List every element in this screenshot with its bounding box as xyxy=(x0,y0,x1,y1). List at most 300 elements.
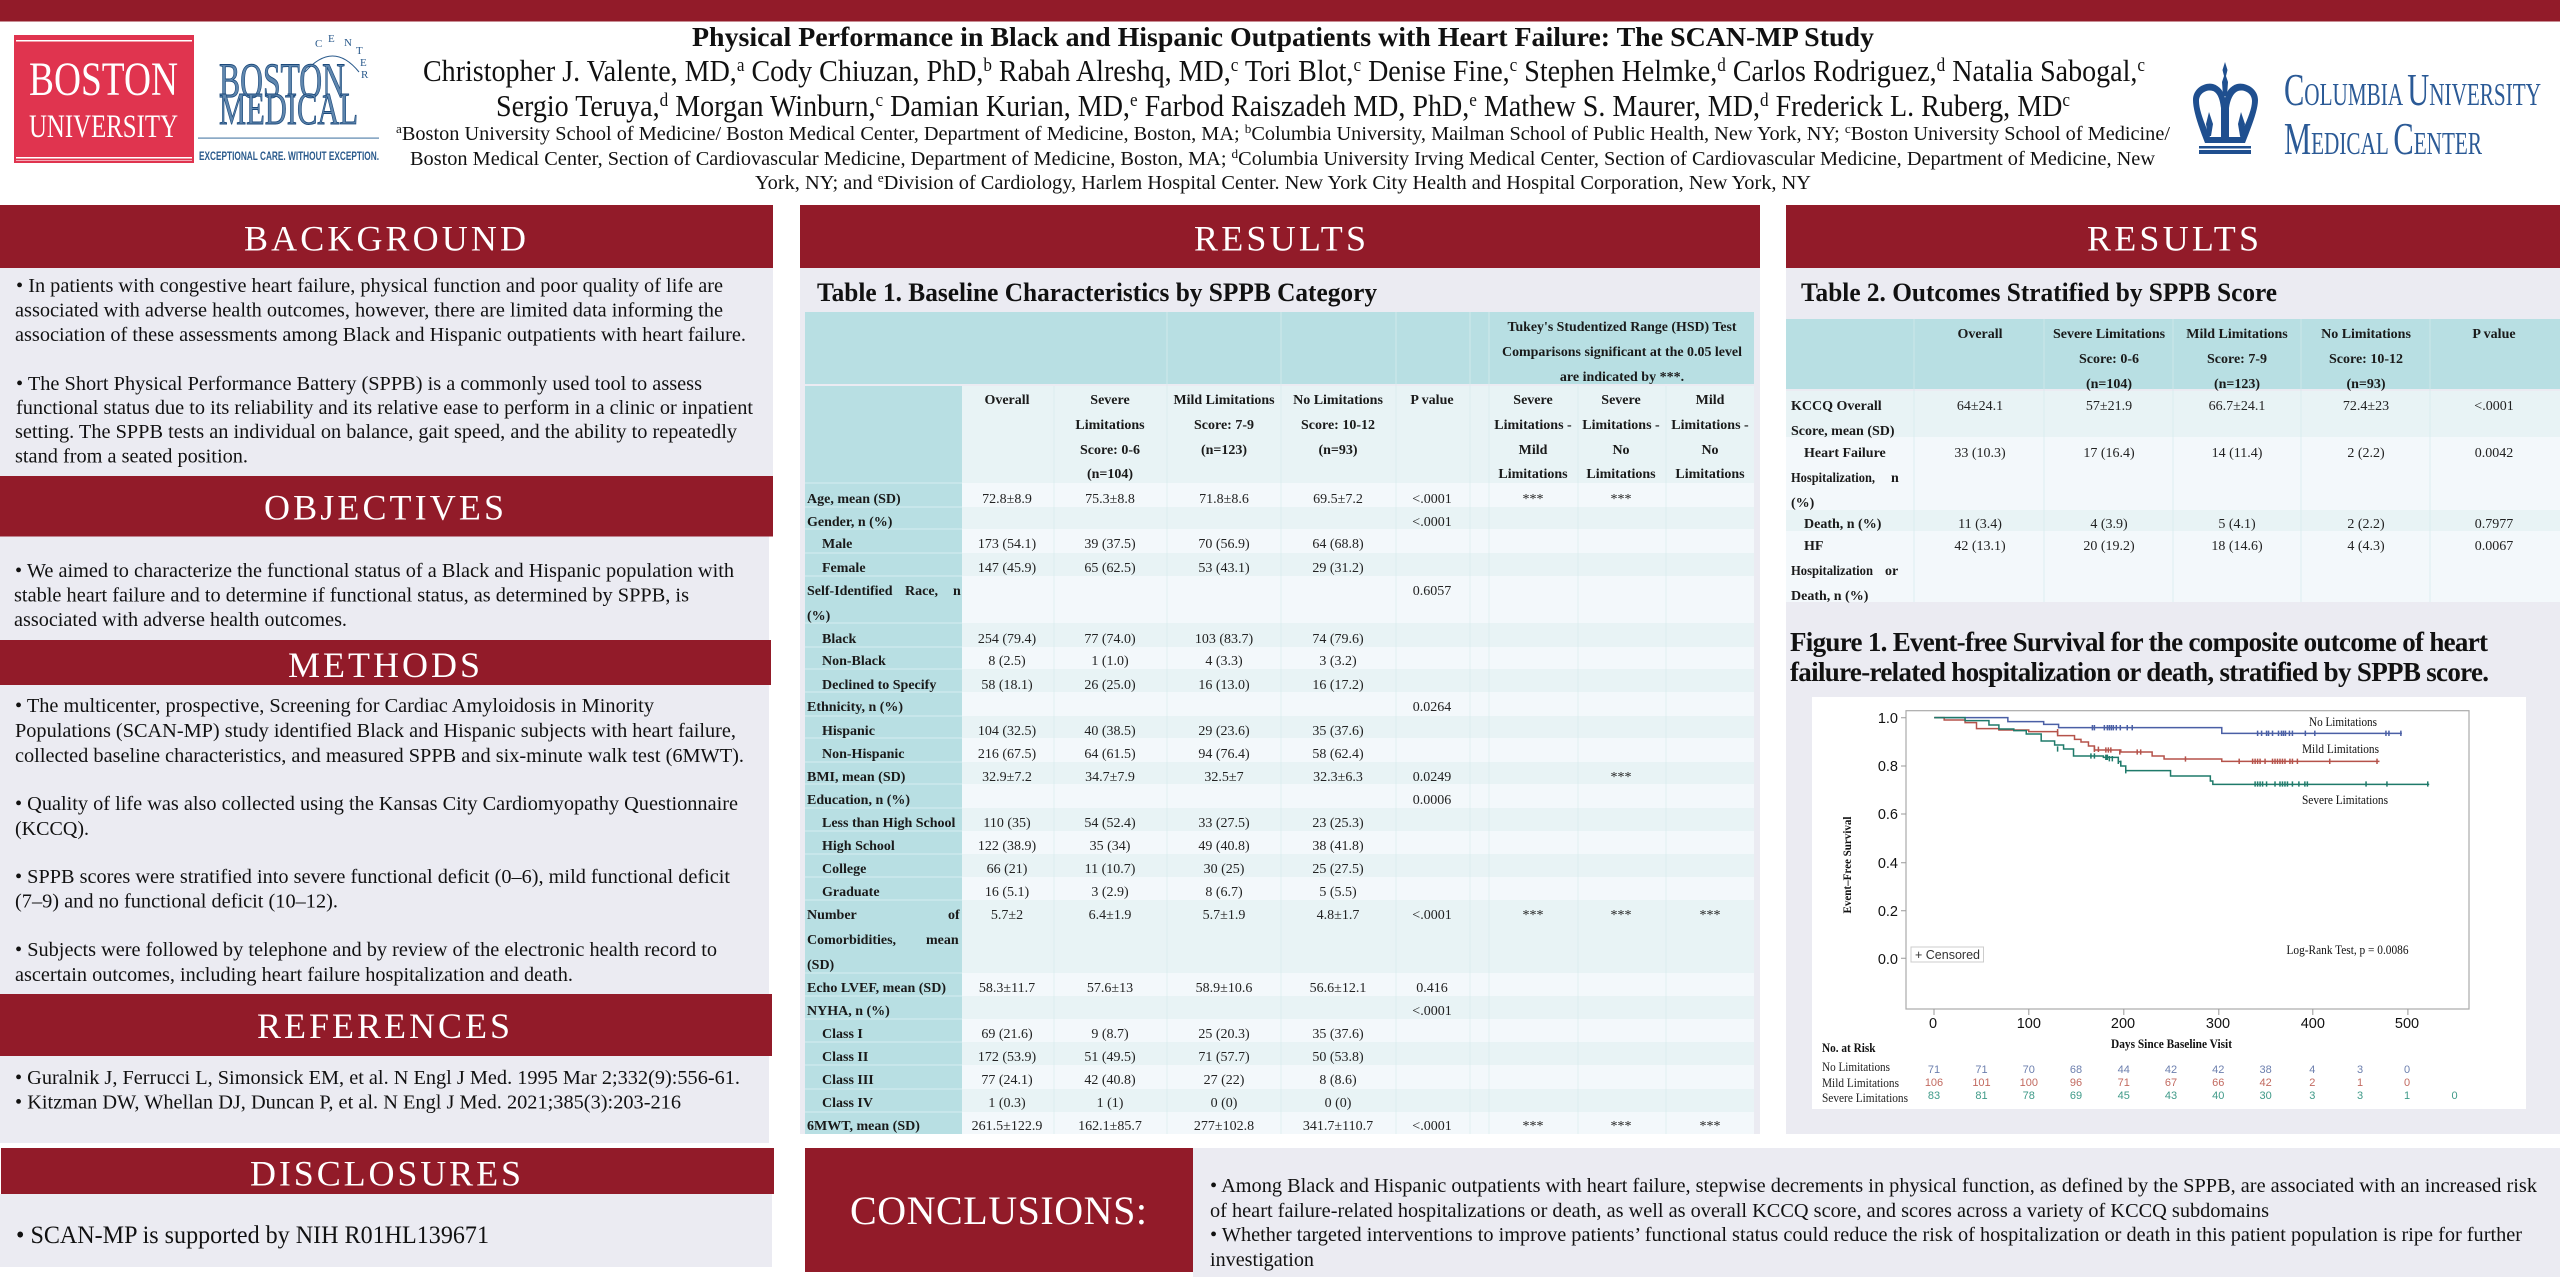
number at risk table: No Limitations xyxy=(1822,1059,1890,1074)
censored legend: + Censored xyxy=(1915,947,1980,962)
table 1 row: class III xyxy=(822,1073,1357,1088)
table 1 row: class I: Class I xyxy=(822,1027,863,1042)
survival curves xyxy=(1934,718,2429,787)
table 2 row: KCCQ overall score: <.0001 xyxy=(2474,399,2514,414)
table 2 column headers: (n=104) xyxy=(2086,377,2132,392)
panel: results table 2 and figure 1 xyxy=(1786,205,2560,1134)
panel: objectives xyxy=(0,476,773,640)
table 1 row: gender xyxy=(807,515,1452,530)
table 2 row: HF hospitalization or death xyxy=(1791,539,2513,604)
text: objectives: • We aimed to characterize the functional status of a Black and Hispanic population with xyxy=(15,560,734,582)
logo: Boston University: BOSTON xyxy=(29,53,178,106)
table 1 row: declined to specify: 26 (25.0) xyxy=(1084,678,1136,693)
text: disclosures: • SCAN-MP is supported by NIH R01HL139671 xyxy=(16,1222,489,1249)
number at risk table: 40 xyxy=(2212,1090,2224,1102)
text: methods xyxy=(15,695,744,986)
curve labels: Mild Limitations xyxy=(2302,741,2379,756)
number at risk table xyxy=(1822,1041,2458,1105)
table 1 row: declined to specify xyxy=(822,678,1364,693)
table 1 row: gender: <.0001 xyxy=(1412,515,1452,530)
table 1 row: NYHA xyxy=(807,1004,1452,1019)
x axis tick labels: 500 xyxy=(2395,1016,2419,1032)
table 1 row: class II: 71 (57.7) xyxy=(1198,1050,1250,1065)
text: conclusions: of heart failure-related hospitalizations or death, as well as overall KCCQ score, and scores across a variety of KCCQ subdomains xyxy=(1210,1200,2269,1222)
text: background points xyxy=(15,275,753,468)
table 1 row: age: 75.3±8.8 xyxy=(1085,492,1135,507)
table 1 row: echo LVEF: 57.6±13 xyxy=(1087,981,1133,996)
table 1 row: self-identified race xyxy=(807,584,1451,624)
x axis tick labels: 200 xyxy=(2111,1016,2135,1032)
table 1 column headers: Limitations - xyxy=(1494,418,1572,433)
table 1 row: non-black: 1 (1.0) xyxy=(1091,654,1129,669)
authors: d xyxy=(1717,55,1726,76)
heading: results: RESULTS xyxy=(1194,218,1366,258)
y axis tick labels: 0.6 xyxy=(1878,807,1898,823)
logo: Boston Medical Center: E xyxy=(360,57,367,69)
authors: Christopher J. Valente, MD, xyxy=(423,53,770,88)
table 2 row: heart failure hospitalization: 2 (2.2) xyxy=(2347,446,2385,461)
number at risk table: Mild Limitations xyxy=(1822,1075,1899,1090)
number at risk table: 4 xyxy=(2309,1064,2315,1076)
authors: Farbod Raiszadeh MD, PhD, xyxy=(1138,88,1469,123)
table 1 column headers: Limitations - xyxy=(1582,418,1660,433)
table 1 column headers: No xyxy=(1612,443,1630,458)
table 1 column headers: No Limitations xyxy=(1293,393,1383,408)
table 2 row: heart failure hospitalization: 14 (11.4) xyxy=(2212,446,2263,461)
table 1 row: 6MWT: 277±102.8 xyxy=(1194,1119,1254,1134)
table 1 row: high school: 35 (34) xyxy=(1090,839,1131,854)
text: references xyxy=(15,1067,740,1114)
table 1 row: education: 0.0006 xyxy=(1413,793,1451,808)
table 1 column headers xyxy=(984,393,1749,482)
table 1 row: BMI: 32.3±6.3 xyxy=(1313,770,1363,785)
table 1 row: number of comorbidities: Comorbidities, xyxy=(807,933,896,948)
table 1 row: 6MWT: *** xyxy=(1610,1119,1632,1134)
affiliations: a xyxy=(396,121,402,136)
table 2 column headers: P value xyxy=(2472,327,2516,342)
number at risk table: 66 xyxy=(2212,1077,2224,1089)
table 1 Tukey header: are indicated by ***. xyxy=(1560,370,1684,385)
table 1 row: black: 103 (83.7) xyxy=(1195,632,1253,647)
authors xyxy=(423,53,2145,123)
table 2 row: HF hospitalization or death: or xyxy=(1885,564,1898,579)
logo: Boston Medical Center: N xyxy=(344,37,352,49)
authors: e xyxy=(1469,90,1477,111)
table 1 row: NYHA: <.0001 xyxy=(1412,1004,1452,1019)
y axis tick labels: 1.0 xyxy=(1878,711,1898,727)
table 1 row: class II: Class II xyxy=(822,1050,868,1065)
table 1 column headers: Limitations xyxy=(1498,467,1568,482)
table 1 row: 6MWT: 261.5±122.9 xyxy=(972,1119,1042,1134)
table 1 row: declined to specify: 58 (18.1) xyxy=(981,678,1033,693)
table 1 row: number of comorbidities: *** xyxy=(1522,908,1544,923)
table 2 title: Table 2. Outcomes Stratified by SPPB Score xyxy=(1801,278,2277,307)
table 1 row: non-black: 3 (3.2) xyxy=(1319,654,1357,669)
text: methods: (KCCQ). xyxy=(15,818,89,840)
table 2 row: HF hospitalization or death: 4 (4.3) xyxy=(2347,539,2385,554)
number at risk table: 0 xyxy=(2404,1064,2410,1076)
table 1 row: class IV: 0 (0) xyxy=(1211,1096,1238,1111)
table 1 row: declined to specify: 16 (13.0) xyxy=(1198,678,1250,693)
affiliations: b xyxy=(1245,121,1251,136)
table 1 row: class III: 8 (8.6) xyxy=(1319,1073,1357,1088)
text: conclusions xyxy=(1210,1175,2537,1271)
table 2 row: HF hospitalization or death: HF xyxy=(1804,539,1823,554)
table 1 row: non-black: 8 (2.5) xyxy=(988,654,1026,669)
authors: Stephen Helmke, xyxy=(1517,53,1717,88)
table 1 row: self-identified race: n xyxy=(953,584,961,599)
table 1 column headers: Score: 7-9 xyxy=(1194,418,1254,433)
text: objectives: stable heart failure and to determine if functional status, as determined by SPPB, is xyxy=(14,584,689,606)
number at risk table: 3 xyxy=(2357,1090,2363,1102)
table 1 row: 6MWT: *** xyxy=(1700,1119,1720,1134)
table 1 row: class III: 27 (22) xyxy=(1204,1073,1245,1088)
table 2 row: KCCQ overall score: 72.4±23 xyxy=(2343,399,2389,414)
table 1 row: age: Age, mean (SD) xyxy=(807,492,901,507)
authors: Natalia Sabogal, xyxy=(1945,53,2137,88)
number at risk table: 67 xyxy=(2165,1077,2177,1089)
table 1 row: hispanic xyxy=(822,724,1364,739)
table 1 column headers: Overall xyxy=(984,393,1030,408)
number at risk table: 71 xyxy=(1928,1064,1940,1076)
table 1 row: class IV: 0 (0) xyxy=(1325,1096,1352,1111)
authors: Rabah Alreshq, MD, xyxy=(992,53,1231,88)
table 1 row: less than high school xyxy=(822,816,1364,831)
heading: objectives: OBJECTIVES xyxy=(264,488,504,528)
figure 1 title: Figure 1. Event-free Survival for the composite outcome of heart xyxy=(1790,627,2488,657)
affiliations: Division of Cardiology, Harlem Hospital Center. New York City Health and Hospital Corporation, New York, NY xyxy=(884,172,1811,194)
table 2 row: HF hospitalization or death: 20 (19.2) xyxy=(2083,539,2135,554)
table 1 row: female: 65 (62.5) xyxy=(1084,561,1136,576)
table 1 row: black: Black xyxy=(822,632,856,647)
table 1 Tukey header xyxy=(1502,320,1742,385)
table 1 row: graduate: 5 (5.5) xyxy=(1319,885,1357,900)
table 1 column headers: Severe xyxy=(1090,393,1130,408)
logo: Boston Medical Center: T xyxy=(356,45,363,57)
authors: d xyxy=(660,90,669,111)
table 1 row: class IV: Class IV xyxy=(822,1096,873,1111)
table 1 row: age xyxy=(807,492,1632,507)
number at risk table: 0 xyxy=(2404,1077,2410,1089)
figure 1 title: failure-related hospitalization or death, stratified by SPPB score. xyxy=(1790,657,2489,687)
table 1 row: 6MWT: <.0001 xyxy=(1412,1119,1452,1134)
table 1 row: number of comorbidities: mean xyxy=(926,933,959,948)
table 1 row: hispanic: 35 (37.6) xyxy=(1312,724,1364,739)
table 1 row: class I: 9 (8.7) xyxy=(1091,1027,1129,1042)
x axis tick labels: 400 xyxy=(2301,1016,2325,1032)
number at risk table: 69 xyxy=(2070,1090,2082,1102)
authors: Sergio Teruya, xyxy=(496,88,677,123)
number at risk table: 96 xyxy=(2070,1077,2082,1089)
table 1 row: black: 77 (74.0) xyxy=(1084,632,1136,647)
text: conclusions: investigation xyxy=(1210,1249,1314,1271)
table 1 row: black: 254 (79.4) xyxy=(978,632,1036,647)
authors: Denise Fine, xyxy=(1361,53,1510,88)
number at risk table: 30 xyxy=(2259,1090,2272,1102)
table 1 row: number of comorbidities: Number xyxy=(807,908,857,923)
table 1 row: non-black: Non-Black xyxy=(822,654,886,669)
table 2 row: HF hospitalization or death: 18 (14.6) xyxy=(2211,539,2263,554)
authors: c xyxy=(876,90,883,111)
table 1 column headers: (n=104) xyxy=(1087,467,1133,482)
table 1 row: number of comorbidities: (SD) xyxy=(807,958,835,973)
x axis title: Days Since Baseline Visit xyxy=(2111,1037,2233,1051)
text: methods: • SPPB scores were stratified into severe functional deficit (0–6), mild functional deficit xyxy=(15,866,730,888)
number at risk table: 101 xyxy=(1972,1077,1991,1089)
table 1 row: age: 72.8±8.9 xyxy=(982,492,1032,507)
number at risk table: 45 xyxy=(2118,1090,2130,1102)
table 1 row: self-identified race: 0.6057 xyxy=(1413,584,1451,599)
table 1 row: hispanic: 40 (38.5) xyxy=(1084,724,1136,739)
table 1 row: self-identified race: Self-Identified xyxy=(807,584,893,599)
text: references: • Kitzman DW, Whellan DJ, Duncan P, et al. N Engl J Med. 2021;385(3):203-216 xyxy=(15,1092,681,1114)
table 1 row: non-hispanic xyxy=(822,747,1364,762)
table 1 row: male: Male xyxy=(822,537,852,552)
number at risk table: 68 xyxy=(2070,1064,2082,1076)
table 1 row: ethnicity xyxy=(807,700,1451,715)
table 1 row: graduate xyxy=(822,885,1357,900)
table 1 xyxy=(805,312,1754,1134)
x axis tick labels: 300 xyxy=(2206,1016,2230,1032)
affiliations: Columbia University Irving Medical Center, Section of Cardiovascular Medicine, Department of Medicine, New xyxy=(1238,148,2156,170)
curve: mild limitations xyxy=(1934,718,2379,764)
table 1 row: male: 70 (56.9) xyxy=(1198,537,1250,552)
table 1 row: male: 173 (54.1) xyxy=(978,537,1036,552)
table 2 row: KCCQ overall score: 66.7±24.1 xyxy=(2209,399,2265,414)
table 1 row: female xyxy=(822,561,1364,576)
panel: references xyxy=(0,994,772,1143)
panel: results table 1 xyxy=(800,205,1760,1134)
table 1 row: class I: 35 (37.6) xyxy=(1312,1027,1364,1042)
x axis tick labels xyxy=(1929,1016,2419,1032)
affiliations: c xyxy=(1845,121,1851,136)
table 2 row: death: 0.7977 xyxy=(2475,517,2513,532)
table 1 row: class II: 50 (53.8) xyxy=(1312,1050,1364,1065)
table 1 row: non-black xyxy=(822,654,1357,669)
table 2 row: HF hospitalization or death: Hospitalization xyxy=(1791,564,1873,579)
table 2 column headers xyxy=(1957,327,2516,392)
curve: severe limitations xyxy=(1934,718,2429,787)
table 1 row: BMI: 32.9±7.2 xyxy=(982,770,1032,785)
table 1 row: declined to specify: 16 (17.2) xyxy=(1312,678,1364,693)
y axis tick labels: 0.2 xyxy=(1878,904,1898,920)
table 1 row: female: Female xyxy=(822,561,866,576)
text: conclusions: • Whether targeted interventions to improve patients’ functional status could reduce the risk of hospitalization or death in this patient population is ripe for further xyxy=(1210,1224,2522,1246)
table 1 row: black: 74 (79.6) xyxy=(1312,632,1364,647)
table 1 row: less than high school: 54 (52.4) xyxy=(1084,816,1136,831)
y axis tick labels: 0.8 xyxy=(1878,759,1898,775)
table 1 row: number of comorbidities: *** xyxy=(1700,908,1720,923)
curve labels: No Limitations xyxy=(2309,714,2377,729)
plot frame xyxy=(1906,711,2469,1009)
table 1 row: declined to specify: Declined to Specify xyxy=(822,678,936,693)
table 1 row: NYHA: NYHA, n (%) xyxy=(807,1004,890,1019)
table 2 row: heart failure hospitalization: n xyxy=(1891,471,1899,486)
authors: c xyxy=(2137,55,2145,76)
table 1 row: echo LVEF: 58.9±10.6 xyxy=(1196,981,1252,996)
text: methods: • The multicenter, prospective, Screening for Cardiac Amyloidosis in Minority xyxy=(15,695,654,717)
table 1 row: class III: 77 (24.1) xyxy=(981,1073,1033,1088)
table 2 column headers: Mild Limitations xyxy=(2186,327,2288,342)
table 1 Tukey header: Tukey's Studentized Range (HSD) Test xyxy=(1508,320,1737,335)
table 1 row: less than high school: 33 (27.5) xyxy=(1198,816,1250,831)
curve labels xyxy=(2302,714,2388,807)
table 2 column headers: Severe Limitations xyxy=(2053,327,2166,342)
table 1 row: class II: 172 (53.9) xyxy=(978,1050,1036,1065)
table 1 row: 6MWT xyxy=(807,1119,1720,1134)
table 1 row: age: *** xyxy=(1610,492,1632,507)
table 1 row: college: College xyxy=(822,862,866,877)
heading: disclosures: DISCLOSURES xyxy=(250,1154,521,1194)
table 1 row: echo LVEF: Echo LVEF, mean (SD) xyxy=(807,981,946,996)
text: background points: stand from a seated position. xyxy=(15,446,248,468)
table 1 column headers: Mild Limitations xyxy=(1174,393,1275,408)
number at risk table: 83 xyxy=(1928,1090,1940,1102)
x axis tick labels: 100 xyxy=(2017,1016,2041,1032)
table 1 row: BMI: 0.0249 xyxy=(1413,770,1451,785)
authors: e xyxy=(1130,90,1138,111)
table 1 row: echo LVEF: 0.416 xyxy=(1416,981,1448,996)
table 1 row: self-identified race: (%) xyxy=(807,609,831,624)
table 1 column headers: (n=93) xyxy=(1318,443,1358,458)
y axis title: Event–Free Survival xyxy=(1840,816,1854,914)
affiliations: Columbia University, Mailman School of Public Health, New York, NY; xyxy=(1251,123,1845,145)
text: background points: • The Short Physical Performance Battery (SPPB) is a commonly used tool to assess xyxy=(16,373,702,395)
table 1 title: Table 1. Baseline Characteristics by SPPB Category xyxy=(817,278,1377,307)
log-rank annotation: Log-Rank Test, p = 0.0086 xyxy=(2286,942,2409,957)
table 1 column headers: Score: 10-12 xyxy=(1301,418,1375,433)
number at risk table: 70 xyxy=(2023,1064,2035,1076)
text: methods: collected baseline characteristics, and measured SPPB and six-minute walk test (6MWT). xyxy=(15,745,744,767)
table 1 row: hispanic: Hispanic xyxy=(822,724,875,739)
table 1 row: number of comorbidities: <.0001 xyxy=(1412,908,1452,923)
authors: Tori Blot, xyxy=(1238,53,1353,88)
table 1 row: number of comorbidities: of xyxy=(948,908,960,923)
table 2 row: HF hospitalization or death: 0.0067 xyxy=(2475,539,2513,554)
table 1 row: self-identified race: Race, xyxy=(905,584,938,599)
heading: conclusions: CONCLUSIONS: xyxy=(850,1188,1147,1233)
number at risk table: 106 xyxy=(1925,1077,1943,1089)
authors: Damian Kurian, MD, xyxy=(883,88,1130,123)
table 2 row: KCCQ overall score xyxy=(1791,399,2514,439)
table 1 row: graduate: 3 (2.9) xyxy=(1091,885,1129,900)
logo: Boston Medical Center: BOSTON xyxy=(219,52,345,108)
table 2 row: death xyxy=(1804,517,2513,532)
table 1 row: non-black: 4 (3.3) xyxy=(1205,654,1243,669)
table 1 row: gender: Gender, n (%) xyxy=(807,515,893,530)
affiliations: Boston University School of Medicine/ Boston Medical Center, Department of Medicine, Boston, MA; xyxy=(402,123,1245,145)
table 2 row: death: 2 (2.2) xyxy=(2347,517,2385,532)
table 1 row: number of comorbidities xyxy=(807,908,1720,973)
table 2 row: KCCQ overall score: 64±24.1 xyxy=(1957,399,2003,414)
number at risk table: 0 xyxy=(2452,1090,2458,1102)
table 1 row: ethnicity: 0.0264 xyxy=(1413,700,1451,715)
number at risk table: 42 xyxy=(2165,1064,2177,1076)
logo: Columbia University Medical Center: MEDICAL CENTER xyxy=(2284,113,2482,164)
number at risk table: 42 xyxy=(2259,1077,2272,1089)
text: methods: (7–9) and no functional deficit (10–12). xyxy=(15,890,338,912)
table 2 row: heart failure hospitalization: Hospitalization, xyxy=(1791,471,1875,486)
table 1 row: number of comorbidities: 5.7±1.9 xyxy=(1203,908,1245,923)
table 1 row: 6MWT: 162.1±85.7 xyxy=(1078,1119,1142,1134)
table 1 row: less than high school: Less than High School xyxy=(822,816,956,831)
text: background points: association of these assessments among Black and Hispanic outpatients with heart failure. xyxy=(15,324,746,346)
text: objectives xyxy=(14,560,734,631)
table 1 column headers: Mild xyxy=(1696,393,1725,408)
table 2 column headers: Score: 7-9 xyxy=(2207,352,2267,367)
table 2 row: death: 11 (3.4) xyxy=(1958,517,2002,532)
logo: Columbia University Medical Center xyxy=(2193,62,2541,164)
curve: no limitations xyxy=(1934,718,2402,736)
text: background points: • In patients with congestive heart failure, physical function and poor quality of life are xyxy=(16,275,723,297)
affiliations xyxy=(396,121,2170,194)
table 1 row: BMI xyxy=(807,770,1632,785)
text: methods: Populations (SCAN-MP) study identified Black and Hispanic subjects with heart failure, xyxy=(15,720,736,742)
table 1 row: echo LVEF xyxy=(807,981,1448,996)
table 1 row: BMI: 32.5±7 xyxy=(1204,770,1244,785)
text: methods: ascertain outcomes, including heart failure hospitalization and death. xyxy=(15,964,573,986)
table 2 row: heart failure hospitalization: Heart Failure xyxy=(1804,446,1886,461)
table 2 row: HF hospitalization or death: Death, n (%) xyxy=(1791,589,1869,604)
number at risk table: 81 xyxy=(1975,1090,1988,1102)
table 2 column headers: Score: 0-6 xyxy=(2079,352,2139,367)
table 1 column headers: Score: 0-6 xyxy=(1080,443,1140,458)
table 1 row: hispanic: 104 (32.5) xyxy=(978,724,1036,739)
table 1 row: non-hispanic: 58 (62.4) xyxy=(1312,747,1364,762)
text: methods: • Quality of life was also collected using the Kansas City Cardiomyopathy Questionnaire xyxy=(15,793,738,815)
table 1 column headers: Mild xyxy=(1519,443,1548,458)
text: objectives: associated with adverse health outcomes. xyxy=(14,609,347,631)
panel: methods xyxy=(0,640,771,994)
table 1 row: high school: 122 (38.9) xyxy=(978,839,1036,854)
number at risk table: 2 xyxy=(2309,1077,2315,1089)
table 1 row: 6MWT: *** xyxy=(1522,1119,1544,1134)
number at risk table: 1 xyxy=(2404,1090,2410,1102)
table 2 row: heart failure hospitalization: 33 (10.3) xyxy=(1954,446,2006,461)
top banner xyxy=(0,0,2560,22)
table 1 row: female: 53 (43.1) xyxy=(1198,561,1250,576)
table 1 row: college: 11 (10.7) xyxy=(1085,862,1136,877)
authors: Mathew S. Maurer, MD, xyxy=(1477,88,1760,123)
heading: references: REFERENCES xyxy=(257,1006,510,1046)
table 1 row: class II: 51 (49.5) xyxy=(1084,1050,1136,1065)
authors: Morgan Winburn, xyxy=(668,88,876,123)
logo: Boston Medical Center: EXCEPTIONAL CARE. WITHOUT EXCEPTION. xyxy=(199,149,379,163)
table 2 column headers: Overall xyxy=(1957,327,2003,342)
number at risk table: 44 xyxy=(2118,1064,2130,1076)
number at risk table: 3 xyxy=(2357,1064,2363,1076)
table 1 row: number of comorbidities: 4.8±1.7 xyxy=(1317,908,1359,923)
table 1 row: number of comorbidities: 5.7±2 xyxy=(991,908,1023,923)
table 2 column headers: (n=123) xyxy=(2214,377,2260,392)
table 1 row: age: *** xyxy=(1522,492,1544,507)
number at risk table: Severe Limitations xyxy=(1822,1090,1908,1105)
table 1 row: class IV: 1 (1) xyxy=(1097,1096,1124,1111)
table 1 row: black xyxy=(822,632,1364,647)
table 1 row: college: 25 (27.5) xyxy=(1312,862,1364,877)
table 1 column headers: Limitations xyxy=(1075,418,1145,433)
table 1 row: class I xyxy=(822,1027,1364,1042)
table 1 column headers: No xyxy=(1701,443,1719,458)
title: Physical Performance in Black and Hispanic Outpatients with Heart Failure: The SCAN-MP Study xyxy=(692,22,1875,52)
y axis tick labels: 0.0 xyxy=(1878,952,1898,968)
table 1 row: non-hispanic: Non-Hispanic xyxy=(822,747,904,762)
logo: Boston Medical Center: R xyxy=(361,69,369,81)
table 2 column headers: (n=93) xyxy=(2346,377,2386,392)
table 1 row: class IV: 1 (0.3) xyxy=(988,1096,1026,1111)
affiliations: Boston University School of Medicine/ xyxy=(1851,123,2170,145)
table 1 row: graduate: 16 (5.1) xyxy=(985,885,1029,900)
